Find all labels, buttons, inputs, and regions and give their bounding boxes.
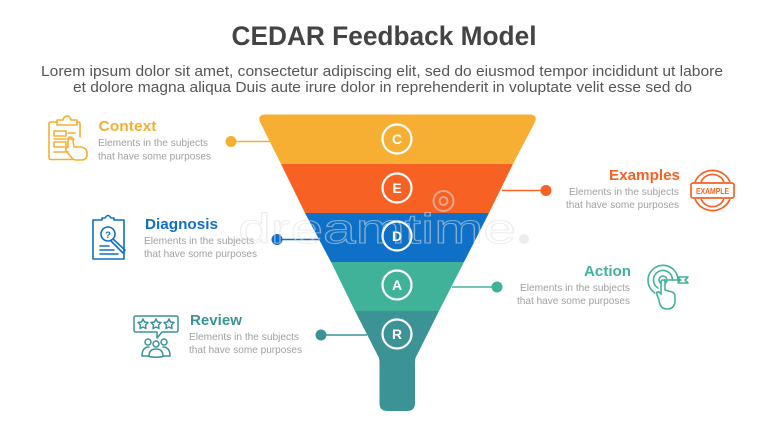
connector: Examples [502,185,552,196]
funnel band: D [305,213,489,262]
connector: Context [226,136,270,147]
letter badge: D [382,222,412,250]
label: Action [517,264,631,307]
letter badge: C [382,124,412,154]
icon: clipboard with magnifier: ? [105,230,111,241]
watermark: dreamtime [238,205,516,252]
label: Review: that have some purposes [189,345,302,356]
label: Context [98,119,211,162]
connector: Review [316,330,367,340]
label: Context: Elements in the subjects [98,138,208,149]
icon: example stamp: EXAMPLE [696,187,730,196]
icon: clipboard with hand [49,116,87,160]
icon: target with hand [648,265,688,309]
letter badge: A [382,270,412,300]
label: Examples: Elements in the subjects [569,187,679,198]
watermark [238,191,529,252]
icon: clipboard with magnifier [93,216,125,259]
label: Diagnosis: Diagnosis [145,217,218,233]
letter badge: D: D [392,228,402,244]
letter badge: R: R [392,326,402,342]
letter badge: A: A [392,277,402,293]
label: Review: Review [190,313,243,329]
label: Examples [566,168,680,211]
title: CEDAR Feedback Model [232,21,536,51]
label: Context: Context [98,119,157,135]
label: Diagnosis [144,217,257,260]
label: Action: that have some purposes [517,296,630,307]
letter badge: E: E [392,180,402,196]
funnel band: R and stem [355,311,439,411]
funnel chart [259,114,536,411]
letter badge: E [382,174,412,202]
letter badge: C: C [392,131,402,147]
funnel band: E [281,164,513,213]
label: Action: Elements in the subjects [520,283,630,294]
label: Action: Action [584,264,631,280]
letter badge: R [382,320,412,348]
funnel band: A [331,262,464,311]
label: Diagnosis: that have some purposes [144,249,257,260]
funnel band: C [259,114,536,164]
label: Review [189,313,302,356]
label: Context: that have some purposes [98,152,211,162]
label: Examples: that have some purposes [566,200,679,211]
intro text [41,64,723,96]
icon: review stars and people [134,316,178,357]
label: Examples: Examples [609,168,680,184]
connector: Action [452,282,502,292]
intro text: et dolore magna aliqua Duis aute irure dolor in reprehenderit in voluptate velit esse sed do [73,80,692,96]
label: Diagnosis: Elements in the subjects [144,236,254,247]
icon: example stamp [691,170,734,211]
connector: Diagnosis [272,234,320,245]
label: Review: Elements in the subjects [189,332,299,343]
intro text: Lorem ipsum dolor sit amet, consectetur adipiscing elit, sed do eiusmod tempor incididunt ut labore [41,64,723,80]
